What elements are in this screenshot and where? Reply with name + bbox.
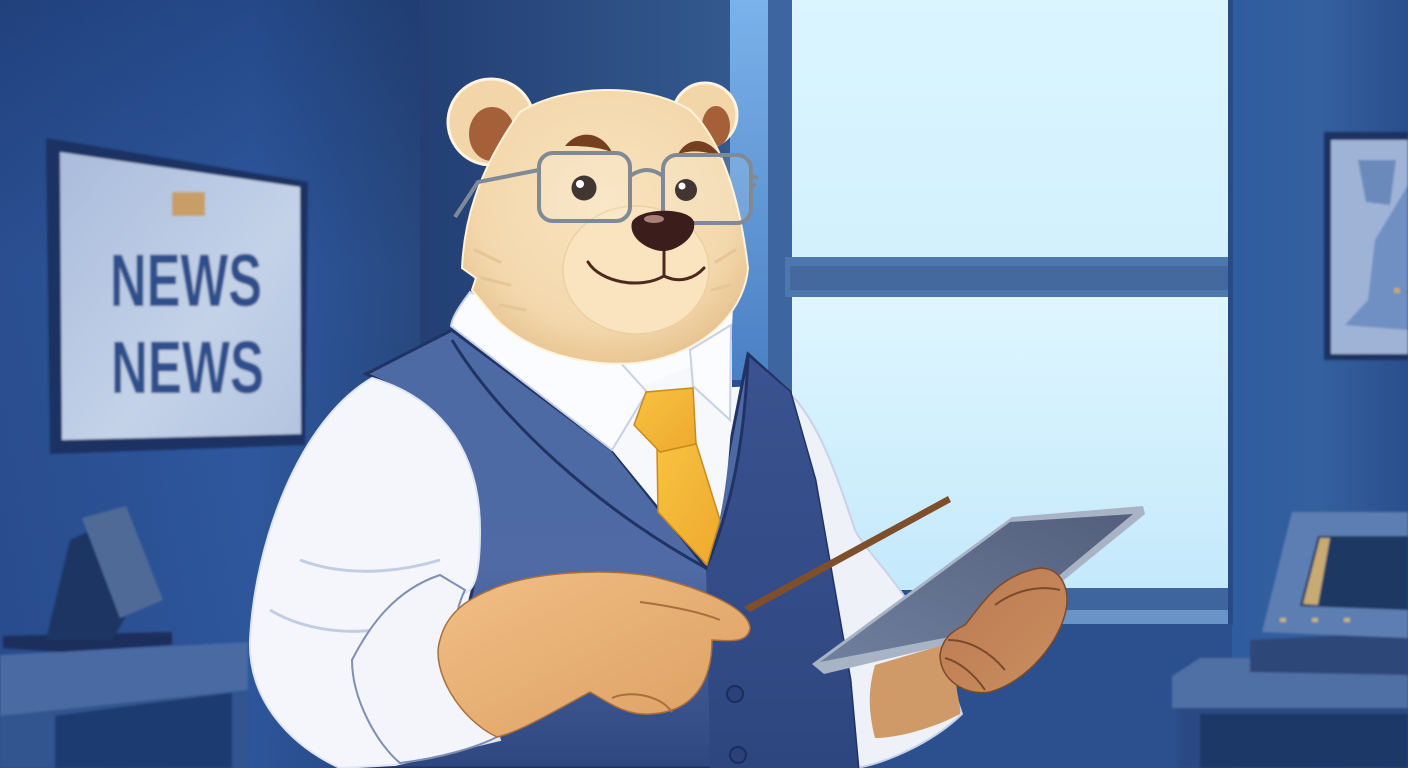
muzzle: [563, 206, 709, 334]
right map poster: [1324, 132, 1408, 360]
news board: [46, 138, 308, 454]
tablet: [812, 506, 1145, 674]
board headline 2: NEWS: [111, 326, 264, 409]
sleeve cuff: [352, 575, 497, 763]
right ear: [673, 83, 737, 147]
vest lapel edge: [452, 340, 748, 568]
head group: [448, 79, 758, 565]
glasses: [455, 153, 758, 223]
left sleeve: [250, 378, 500, 768]
right hand: [940, 568, 1067, 693]
right desk and monitor: [1172, 512, 1408, 768]
shirt torso: [360, 385, 860, 768]
left desk and device: [0, 506, 248, 768]
board note: [172, 192, 205, 216]
left arm and hand: [438, 572, 750, 737]
vest right panel: [706, 356, 858, 768]
face: [462, 90, 748, 364]
shirt right sleeve (far): [780, 385, 962, 768]
left ear: [448, 79, 534, 165]
vest buttons: [727, 686, 746, 763]
vest: [360, 330, 858, 768]
nose: [631, 211, 694, 251]
right forearm: [870, 640, 960, 738]
mouth: [588, 250, 704, 283]
board headline 1: NEWS: [110, 239, 262, 322]
necktie: [634, 388, 720, 565]
bear: [250, 79, 1145, 768]
pointer stick: [744, 496, 951, 612]
collar right flap: [690, 325, 731, 420]
eyebrows: [565, 135, 612, 152]
window: [730, 0, 1233, 768]
shirt front: [560, 340, 732, 565]
eyes: [572, 176, 596, 200]
fur tufts: [475, 250, 735, 310]
shirt neck: [470, 260, 735, 395]
collar left flap: [451, 292, 647, 450]
sleeve folds: [270, 560, 450, 631]
